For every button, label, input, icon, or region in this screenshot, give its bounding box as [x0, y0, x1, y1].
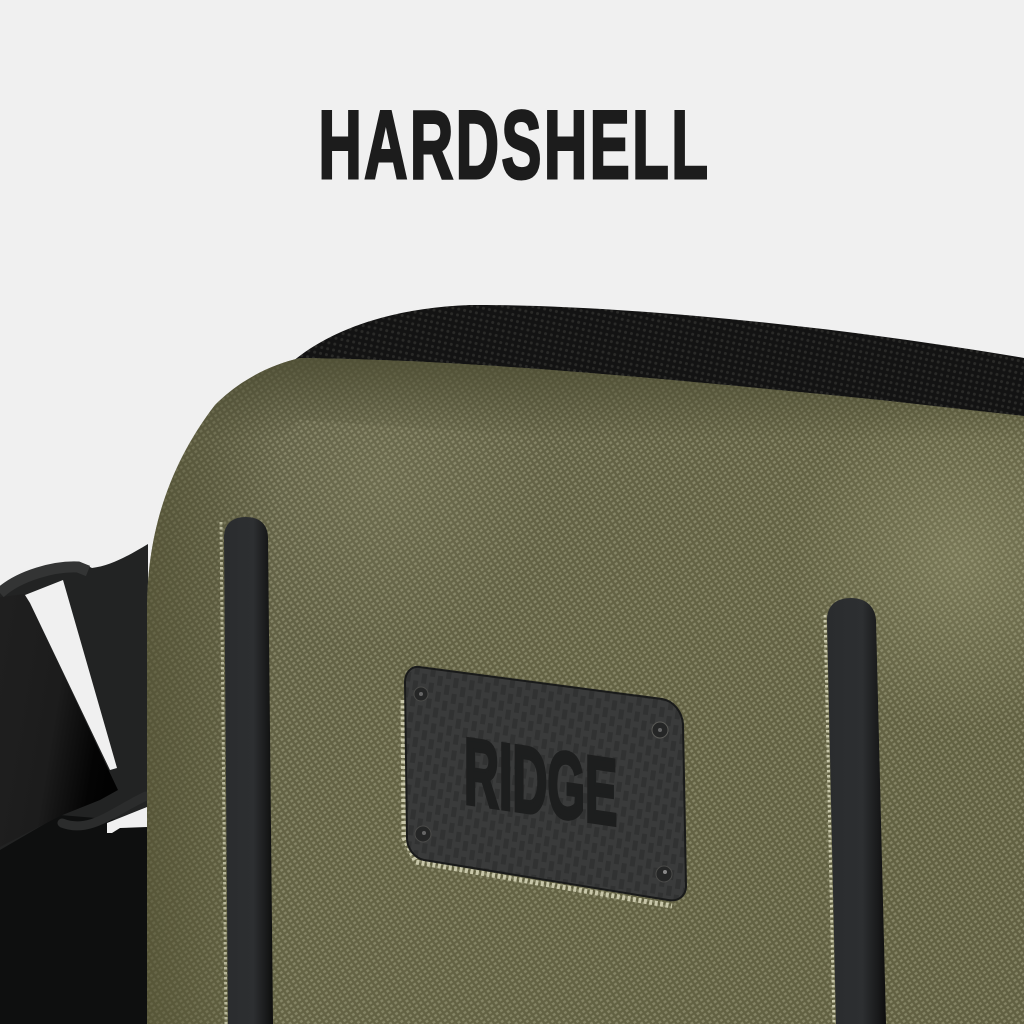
badge logo text: RIDGE	[464, 718, 617, 845]
strap and buckle	[0, 544, 148, 1024]
screw top-left	[414, 687, 428, 701]
screw bottom-right	[656, 866, 672, 882]
screw top-right	[652, 722, 668, 738]
gap in strap, lower	[107, 807, 147, 833]
front webbing strap	[0, 594, 118, 847]
zipper band	[292, 305, 1024, 420]
highlight stitches beside left rail	[221, 522, 226, 1024]
left rail	[224, 517, 273, 1024]
lower buckle loop	[62, 796, 146, 826]
badge highlight edge	[403, 700, 672, 906]
lower strap panel	[0, 815, 148, 1024]
right rail	[827, 598, 886, 1024]
strap backing	[0, 544, 148, 1024]
gap in strap, upper	[25, 580, 117, 770]
buckle ring	[0, 567, 88, 593]
screw bottom-left	[415, 826, 431, 842]
title: HARDSHELL	[318, 91, 708, 199]
highlight stitches beside right rail	[825, 615, 834, 1024]
logo badge	[403, 667, 686, 906]
badge plate	[405, 667, 686, 900]
hardshell body	[140, 350, 1024, 1024]
